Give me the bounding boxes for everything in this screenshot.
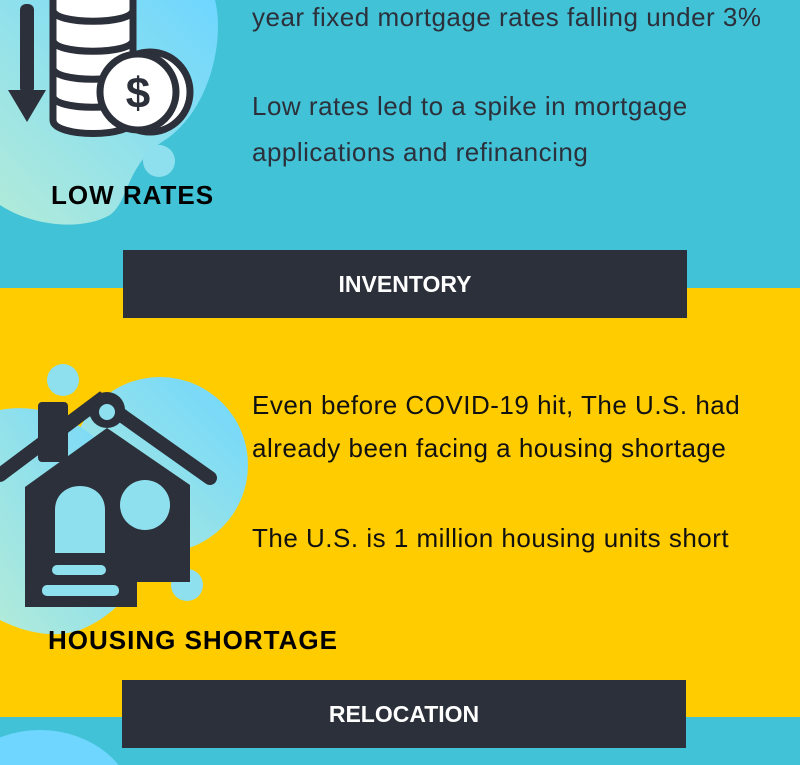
- text block: low rates: [252, 2, 762, 167]
- text block: housing shortage: [252, 390, 740, 553]
- text block: low rates: Low rates led to a spike in mortgage: [252, 91, 688, 121]
- text block: low rates: year fixed mortgage rates falling under 3%: [252, 2, 762, 32]
- icon: coin stack: $: [126, 69, 150, 118]
- icon: down arrow: [8, 4, 46, 122]
- text block: housing shortage: Even before COVID-19 hit, The U.S. had: [252, 390, 740, 420]
- icon: house: [0, 392, 210, 607]
- text block: housing shortage: already been facing a housing shortage: [252, 433, 726, 463]
- label: low rates: LOW RATES: [51, 180, 214, 210]
- banner: inventory: INVENTORY: [339, 270, 471, 296]
- background: yellow band: [0, 288, 800, 717]
- banner: relocation: [122, 680, 686, 748]
- blob: housing: [0, 364, 248, 634]
- blob: low rates: [0, 0, 218, 225]
- banner: inventory: [123, 250, 687, 318]
- icon: coin stack: [53, 0, 190, 134]
- text block: low rates: applications and refinancing: [252, 137, 588, 167]
- blob: relocation: [0, 730, 135, 765]
- banner: relocation: RELOCATION: [329, 700, 479, 726]
- text block: housing shortage: The U.S. is 1 million housing units short: [252, 523, 729, 553]
- label: housing shortage: HOUSING SHORTAGE: [48, 625, 338, 655]
